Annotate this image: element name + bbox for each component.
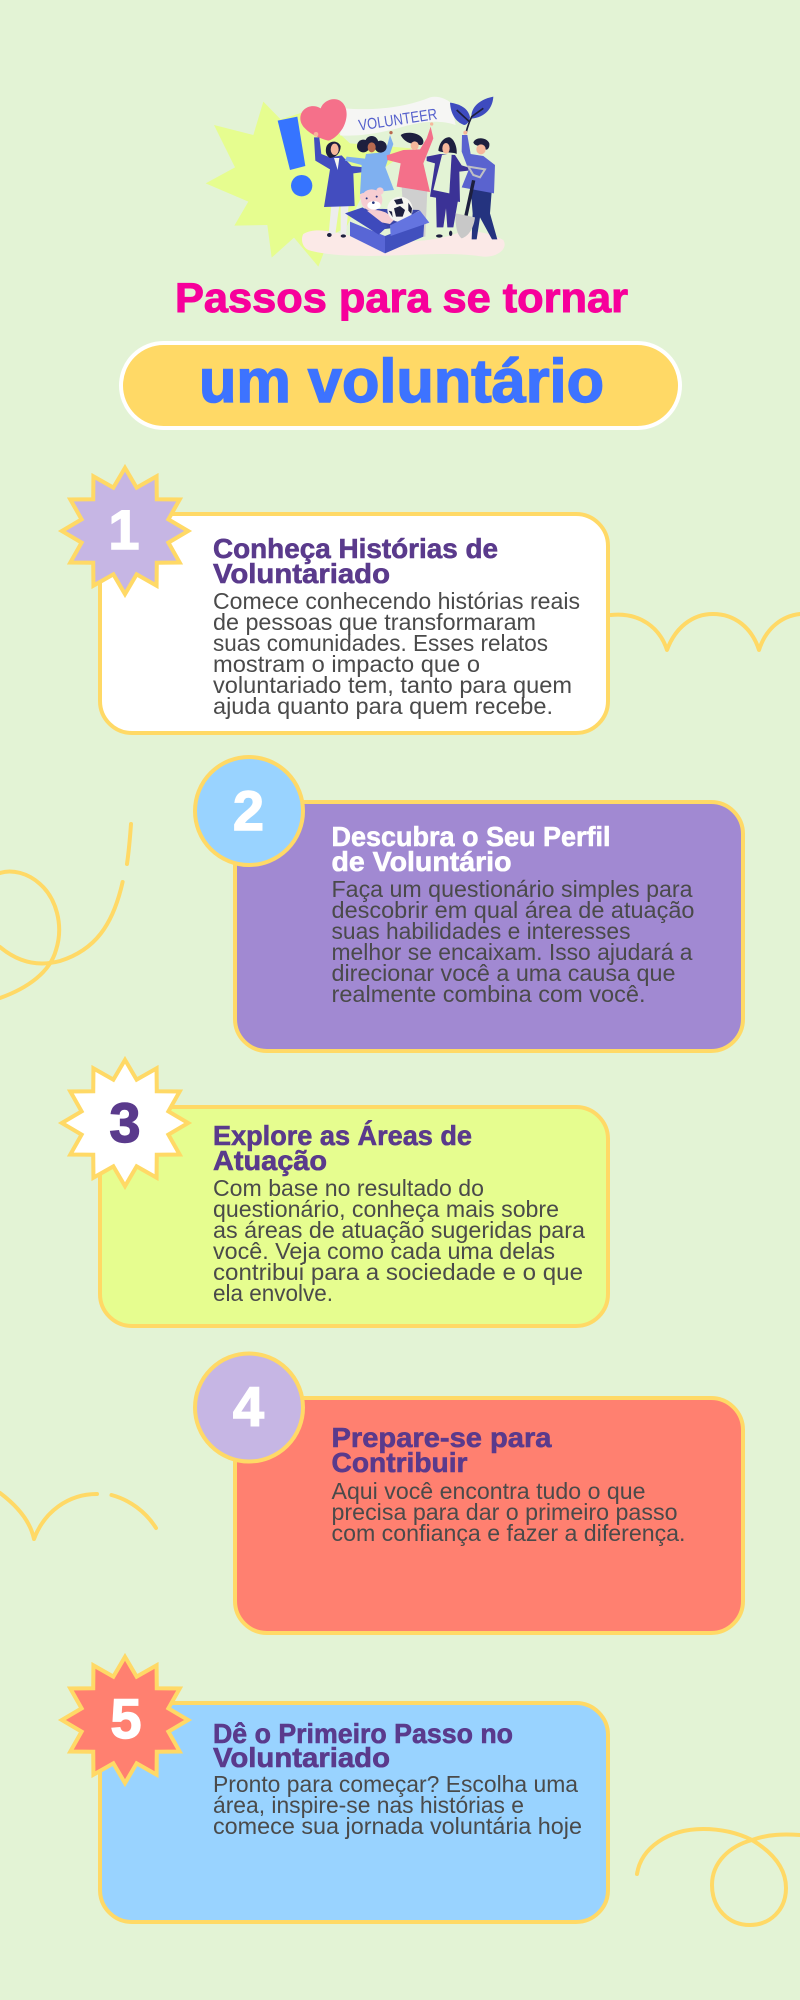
heading: de Voluntário bbox=[332, 846, 512, 877]
decorative squiggle: top right waves bbox=[611, 614, 800, 650]
decorative squiggle: lower left waves bbox=[0, 1493, 156, 1539]
body text: Faça um questionário simples para bbox=[332, 876, 693, 902]
icon: teddy bear bbox=[360, 187, 394, 224]
badge: number 2 bbox=[195, 757, 303, 865]
panel: step 1 bbox=[62, 468, 608, 733]
icon: donation box bbox=[345, 207, 429, 253]
body text: de pessoas que transformaram bbox=[213, 609, 536, 635]
illustration: volunteers group bbox=[206, 97, 505, 267]
heading: Descubra o Seu Perfil bbox=[332, 821, 610, 852]
figure: person three bbox=[387, 122, 433, 237]
badge: number 4 bbox=[195, 1354, 303, 1462]
card background bbox=[100, 1107, 608, 1326]
body text: Comece conhecendo histórias reais bbox=[213, 588, 580, 614]
body text: precisa para dar o primeiro passo bbox=[332, 1499, 678, 1525]
badge: number 2: 2 bbox=[233, 779, 264, 842]
body text bbox=[332, 876, 694, 1007]
heading bbox=[213, 1120, 472, 1176]
heading bbox=[332, 1422, 552, 1478]
body text: as áreas de atuação sugeridas para bbox=[213, 1217, 585, 1243]
icon: ground blob bbox=[302, 230, 505, 257]
icon: volunteer banner bbox=[340, 97, 456, 136]
icon: box interior bbox=[360, 208, 420, 230]
body text: direcionar você a uma causa que bbox=[332, 960, 676, 986]
body text: área, inspire-se nas histórias e bbox=[213, 1792, 524, 1818]
title: yellow pill bbox=[121, 343, 680, 428]
body text bbox=[213, 1771, 582, 1839]
body text: suas habilidades e interesses bbox=[332, 918, 630, 944]
heading: Prepare-se para bbox=[332, 1422, 552, 1453]
body text: comece sua jornada voluntária hoje bbox=[213, 1813, 582, 1839]
heading: Conheça Histórias de bbox=[213, 533, 498, 564]
heading: Contribuir bbox=[332, 1447, 468, 1478]
body text: Pronto para começar? Escolha uma bbox=[213, 1771, 578, 1797]
icon: heart bbox=[300, 99, 347, 141]
badge: number 1: 1 bbox=[108, 498, 140, 561]
body text: voluntariado tem, tanto para quem bbox=[213, 672, 572, 698]
card background bbox=[235, 1398, 743, 1633]
body text: Aqui você encontra tudo o que bbox=[332, 1478, 646, 1504]
body text bbox=[332, 1478, 686, 1546]
heading: Voluntariado bbox=[213, 558, 390, 589]
body text: questionário, conheça mais sobre bbox=[213, 1196, 559, 1222]
body text: ela envolve. bbox=[213, 1280, 333, 1306]
icon: exclamation mark bbox=[278, 117, 312, 196]
card background bbox=[100, 1703, 608, 1922]
body text: melhor se encaixam. Isso ajudará a bbox=[332, 939, 693, 965]
icon: lime burst bbox=[206, 102, 412, 267]
figure: person five with shovel and plant bbox=[450, 97, 497, 239]
card background bbox=[235, 802, 743, 1051]
body text: você. Veja como cada uma delas bbox=[213, 1238, 555, 1264]
body text bbox=[213, 1175, 585, 1306]
title: yellow pill: um voluntário bbox=[199, 347, 604, 415]
heading bbox=[213, 533, 498, 589]
body text: suas comunidades. Esses relatos bbox=[213, 630, 548, 656]
panel: step 3 bbox=[62, 1060, 608, 1326]
heading bbox=[213, 1718, 513, 1773]
decorative squiggle: left loop bbox=[0, 824, 131, 998]
decorative squiggle: bottom right loop bbox=[637, 1829, 800, 1925]
body text bbox=[213, 588, 580, 719]
heading: Explore as Áreas de bbox=[213, 1120, 472, 1151]
body text: mostram o impacto que o bbox=[213, 651, 480, 677]
card background bbox=[100, 514, 608, 733]
body text: com confiança e fazer a diferença. bbox=[332, 1520, 686, 1546]
badge: number 3: 3 bbox=[109, 1091, 141, 1154]
body text: contribui para a sociedade e o que bbox=[213, 1259, 583, 1285]
icon: volunteer banner: VOLUNTEER bbox=[357, 106, 438, 135]
badge: number 5 bbox=[62, 1657, 188, 1783]
badge: number 3 bbox=[62, 1060, 188, 1186]
panel: step 5 bbox=[62, 1657, 608, 1922]
panel: step 2 bbox=[195, 757, 743, 1051]
body text: realmente combina com você. bbox=[332, 981, 646, 1007]
figure: person four bbox=[427, 137, 468, 238]
badge: number 4: 4 bbox=[233, 1375, 264, 1438]
icon: soccer ball bbox=[387, 197, 413, 222]
figure: person one bbox=[314, 132, 364, 238]
figure: person two bbox=[345, 131, 394, 194]
badge: number 1 bbox=[62, 468, 188, 594]
body text: Com base no resultado do bbox=[213, 1175, 484, 1201]
body text: ajuda quanto para quem recebe. bbox=[213, 693, 553, 719]
heading: Voluntariado bbox=[213, 1742, 390, 1773]
badge: number 5: 5 bbox=[110, 1687, 142, 1750]
body text: descobrir em qual área de atuação bbox=[332, 897, 694, 923]
panel: step 4 bbox=[195, 1354, 743, 1633]
heading: Dê o Primeiro Passo no bbox=[213, 1718, 513, 1749]
title: first line: Passos para se tornar bbox=[175, 274, 628, 321]
heading: Atuação bbox=[213, 1145, 327, 1176]
heading bbox=[332, 821, 610, 877]
